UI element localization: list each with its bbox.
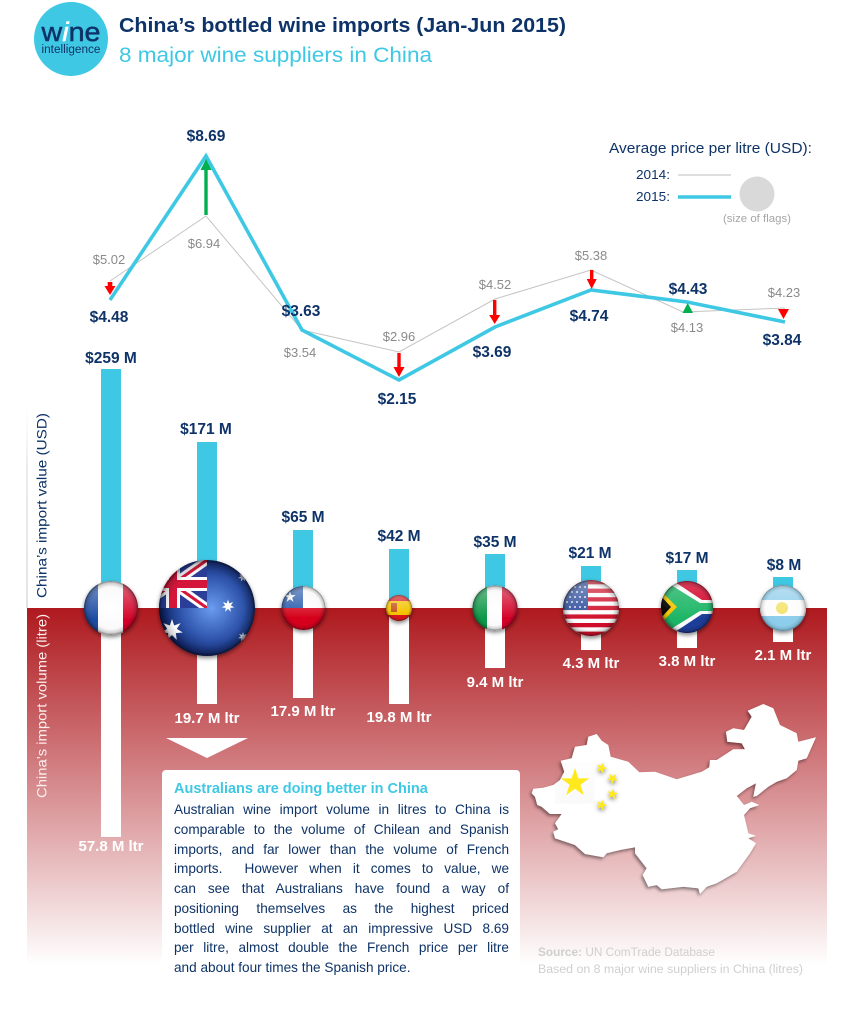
value labels: $65 M (281, 509, 325, 526)
flag: Argentina (760, 585, 806, 631)
price labels 2015: $4.74 (570, 308, 609, 325)
bars: import value (101, 369, 793, 608)
price labels 2014: $4.52 (479, 277, 511, 292)
legend: average price per litre: 2015: (636, 189, 670, 204)
arrow: pointer to Australia callout (166, 738, 248, 758)
price labels 2015: $3.63 (282, 303, 321, 320)
callout body text: per litre, almost double the French price per litre (174, 940, 509, 955)
value labels: $171 M (180, 421, 232, 438)
price labels 2015: $8.69 (187, 128, 226, 145)
logo: wine intelligence: intelligence (42, 44, 100, 56)
price labels 2015: $3.69 (473, 344, 512, 361)
volume labels: 19.8 M ltr (366, 709, 432, 726)
volume labels: 2.1 M ltr (755, 647, 812, 664)
callout body text: bottled wine supplier at an impressive USD 8.69 (174, 920, 509, 936)
flag: France (84, 581, 138, 635)
logo: wine intelligence: wine (40, 17, 100, 47)
source note: Based on 8 major wine suppliers in China (litres) (538, 964, 803, 976)
value labels (85, 350, 801, 574)
volume labels: 19.7 M ltr (174, 710, 240, 727)
price labels 2014: $4.23 (768, 285, 800, 300)
price labels 2014: $6.94 (188, 236, 220, 251)
title: China’s bottled wine imports (Jan-Jun 2015) (119, 14, 566, 37)
price labels 2014: $4.13 (671, 320, 703, 335)
panel: red volume background (27, 608, 827, 965)
volume labels (78, 647, 812, 855)
callout body text: imports, and far lower than the volume of French (174, 842, 509, 856)
callout body text: can see that Australians have found a way of (174, 881, 509, 896)
price labels 2014: $5.38 (575, 248, 607, 263)
callout body text: Australian wine import volume in litres to China is (174, 802, 509, 817)
axis strip: value side (26, 405, 28, 608)
line chart: average price per litre (90, 128, 802, 408)
value labels: $35 M (473, 534, 517, 551)
change arrows (104, 159, 789, 377)
flag: Italy (472, 585, 518, 631)
callout body text: imports. However when it comes to value, we (174, 861, 509, 876)
stars: small (595, 761, 620, 811)
callout: Australians are doing better in China (162, 770, 520, 985)
price labels 2014: $5.02 (93, 252, 125, 267)
map of China with flag stars (532, 704, 816, 894)
value labels: $42 M (377, 528, 421, 545)
value labels: $8 M (767, 557, 801, 574)
flag: Australia (139, 560, 255, 656)
legend: average price per litre (609, 141, 812, 225)
price labels 2015: $4.48 (90, 309, 129, 326)
callout heading: Australians are doing better in China (174, 781, 428, 797)
value labels: $259 M (85, 350, 137, 367)
line: 2015 price (110, 156, 785, 380)
price labels 2014: $2.96 (383, 329, 415, 344)
line: 2014 price (110, 216, 785, 352)
China outline (532, 704, 816, 894)
flag: Spain (386, 595, 412, 621)
callout body text: comparable to the volume of Chilean and Spanish (174, 822, 509, 837)
flag: USA (563, 580, 619, 636)
price labels 2014: $3.54 (284, 345, 316, 360)
volume labels: 4.3 M ltr (563, 655, 620, 672)
volume labels: 3.8 M ltr (659, 653, 716, 670)
axis label: import volume: China’s import volume (litre) (34, 614, 50, 798)
star: large (561, 768, 589, 795)
legend: average price per litre: 2014: (636, 167, 670, 182)
flag: Chile (281, 586, 326, 630)
price labels 2014 (93, 236, 800, 360)
volume labels: 17.9 M ltr (270, 703, 336, 720)
price labels 2015: $2.15 (378, 391, 417, 408)
callout body text (174, 802, 510, 975)
price labels 2015 (90, 128, 802, 408)
bars: import volume (101, 608, 793, 837)
callout body text: positioning themselves as the highest priced (174, 901, 509, 916)
legend: average price per litre: (size of flags) (723, 213, 791, 225)
price labels 2015: $3.84 (763, 332, 802, 349)
subtitle: 8 major wine suppliers in China (119, 44, 432, 67)
value labels: $17 M (665, 550, 709, 567)
volume labels: 57.8 M ltr (78, 838, 144, 855)
source note: Source: UN ComTrade Database (538, 947, 715, 959)
legend: average price per litre: Average price per litre (USD): (609, 141, 812, 157)
flag: South Africa (660, 580, 714, 634)
value labels: $21 M (568, 545, 612, 562)
logo: wine intelligence (34, 2, 108, 76)
source note (538, 947, 803, 976)
callout body text: and about four times the Spanish price. (174, 960, 411, 975)
volume labels: 9.4 M ltr (467, 674, 524, 691)
axis label: import value: China’s import value (USD) (34, 413, 50, 598)
price labels 2015: $4.43 (669, 281, 708, 298)
